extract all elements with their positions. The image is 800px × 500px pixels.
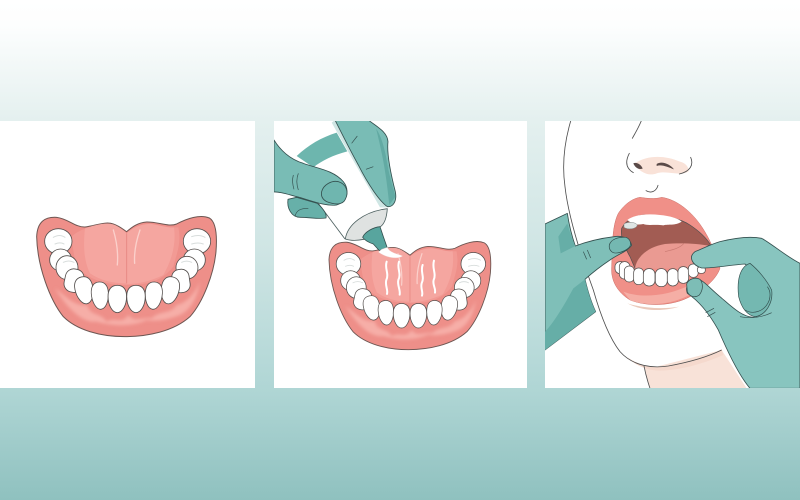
panel: seating the denture bbox=[545, 120, 800, 388]
illustration: dry denture bbox=[37, 216, 216, 337]
nose bbox=[635, 157, 689, 174]
illustration: face, mouth and gloved hands bbox=[545, 120, 800, 388]
illustration: denture with adhesive strips bbox=[329, 242, 491, 350]
panel: clean denture bbox=[0, 121, 255, 388]
upper teeth bbox=[627, 214, 682, 225]
lips bbox=[612, 197, 720, 305]
neck bbox=[644, 350, 747, 388]
tongue bbox=[635, 243, 711, 268]
illustration: adhesive tube and gloved hand bbox=[274, 120, 403, 258]
mouth interior bbox=[621, 215, 711, 268]
lower teeth row bbox=[615, 262, 705, 287]
right gloved hand bbox=[687, 237, 800, 388]
panel: applying adhesive bbox=[274, 120, 527, 388]
left gloved hand bbox=[545, 213, 632, 350]
